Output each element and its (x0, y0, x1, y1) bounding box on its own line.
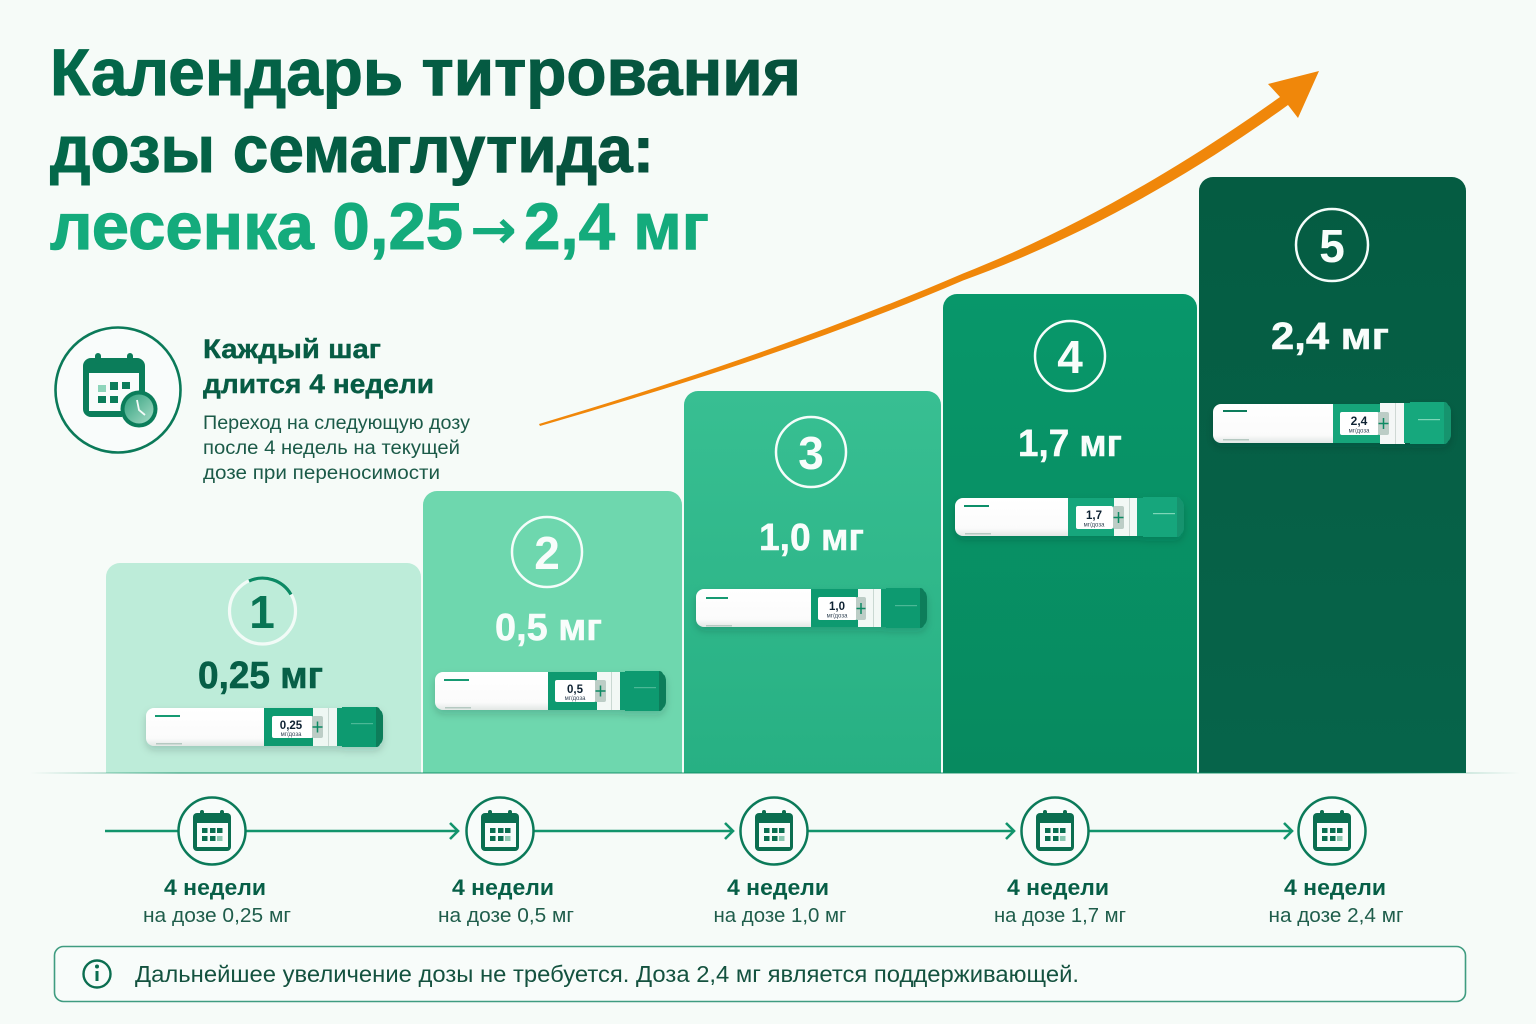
info block: each step lasts 4 weeks (56, 328, 471, 484)
step 4 label: 4 (1057, 331, 1083, 383)
pen 2: 0,5 (567, 684, 584, 696)
callout: maintenance dose note: Дальнейшее увеличение дозы не требуется. Доза 2,4 мг является поддерживающей. (135, 961, 1079, 987)
step bar 3 (684, 391, 941, 773)
pen 1 (146, 707, 383, 747)
timeline line (105, 823, 1292, 839)
icon: calendar (1022, 798, 1088, 864)
pen 3: мг/доза (827, 614, 848, 620)
pen 4 (955, 497, 1184, 537)
icon: info (84, 960, 110, 988)
pen 1: мг/доза (281, 732, 302, 738)
callout: maintenance dose note (54, 946, 1466, 1002)
pen 3 (696, 588, 927, 628)
timeline item 4 (994, 798, 1126, 927)
step 4 label (1018, 321, 1122, 465)
pen 5 (1213, 402, 1451, 444)
step bar 4 (943, 294, 1197, 773)
pen 2: мг/доза (565, 696, 586, 702)
info block: each step lasts 4 weeks: дозе при переносимости (203, 463, 440, 484)
step bar 1 (106, 563, 421, 773)
timeline item 5: 4 недели (1284, 875, 1386, 900)
title: дозы семаглутида: (50, 112, 654, 186)
step 2 label: 0,5 мг (495, 607, 602, 649)
step 1 label: 0,25 мг (198, 655, 323, 697)
pen 1: 0,25 (280, 720, 303, 732)
pen 2 (435, 671, 666, 711)
info block: each step lasts 4 weeks: после 4 недель на текущей (203, 438, 460, 459)
info block: each step lasts 4 weeks: длится 4 недели (203, 369, 434, 399)
timeline item 3: на дозе 1,0 мг (714, 905, 846, 927)
icon: calendar (740, 798, 808, 864)
step 3 label (759, 417, 864, 559)
step 5 label (1271, 209, 1389, 358)
pen 3: 1,0 (829, 601, 845, 613)
timeline item 1: на дозе 0,25 мг (143, 905, 291, 927)
pen 5: мг/доза (1349, 428, 1370, 434)
step 3 label: 3 (798, 427, 824, 479)
icon: calendar (178, 798, 246, 864)
icon: calendar (466, 798, 534, 864)
icon: calendar (1298, 798, 1366, 864)
title: лесенка 0,25 (50, 189, 463, 263)
timeline item 4: 4 недели (1007, 875, 1109, 900)
step 1 label: 1 (249, 586, 275, 638)
timeline item 3 (714, 798, 846, 927)
step 3 label: 1,0 мг (759, 517, 864, 559)
timeline item 1: 4 недели (164, 875, 266, 900)
timeline item 2: 4 недели (452, 875, 554, 900)
timeline item 5 (1268, 798, 1404, 927)
timeline item 3: 4 недели (727, 875, 829, 900)
timeline item 1 (143, 798, 291, 927)
title: Календарь титрования (50, 35, 801, 109)
pen 4: 1,7 (1086, 510, 1102, 522)
info block: each step lasts 4 weeks: Каждый шаг (203, 334, 381, 364)
icon: calendar with clock (56, 328, 180, 452)
step 5 label: 5 (1319, 220, 1345, 272)
title: 2,4 мг (524, 189, 709, 263)
pen 5: 2,4 (1351, 414, 1368, 428)
step 2 label: 2 (534, 527, 560, 579)
growth arrow (539, 71, 1319, 426)
step bar 5 (1199, 177, 1466, 773)
step 4 label: 1,7 мг (1018, 423, 1122, 465)
title (50, 35, 801, 263)
step bar 2 (423, 491, 682, 773)
pen 4: мг/доза (1084, 522, 1105, 528)
timeline item 2: на дозе 0,5 мг (438, 905, 574, 927)
info block: each step lasts 4 weeks: Переход на следующую дозу (203, 413, 471, 434)
title: → (470, 198, 517, 261)
timeline item 5: на дозе 2,4 мг (1268, 905, 1404, 927)
timeline item 4: на дозе 1,7 мг (994, 905, 1126, 927)
timeline item 2 (438, 798, 574, 927)
step 1 label (198, 578, 323, 697)
step 5 label: 2,4 мг (1271, 316, 1389, 358)
step 2 label (495, 517, 602, 649)
